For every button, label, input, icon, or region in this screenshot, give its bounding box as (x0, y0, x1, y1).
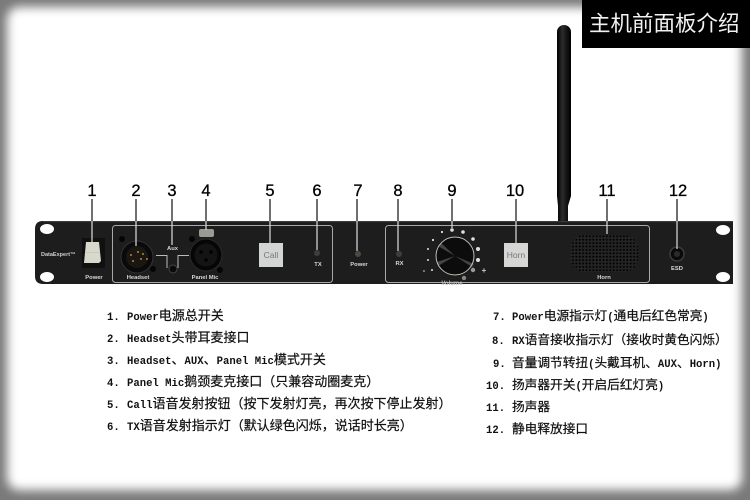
item 5: 5. (107, 400, 120, 412)
callout 6 (312, 182, 322, 250)
legend: left column (107, 309, 451, 434)
call button: Call (264, 250, 278, 260)
callout 10 (506, 182, 524, 243)
call button (259, 243, 283, 267)
callout 11 (598, 182, 616, 234)
TX indicator (314, 250, 322, 268)
TX indicator: TX (314, 262, 322, 268)
callout 5 (265, 182, 275, 243)
callout 6: 6 (312, 182, 322, 200)
aux mode switch: Aux (167, 246, 179, 252)
item 8: 8. (492, 336, 505, 348)
antenna (557, 25, 571, 222)
horn button: Horn (507, 250, 525, 260)
item 7: 7. (493, 312, 506, 324)
speaker grille: Horn (597, 275, 611, 281)
item 10: 10. (486, 381, 505, 393)
power switch: Power (85, 275, 103, 281)
mounting holes (40, 224, 730, 282)
title banner (582, 0, 750, 48)
item 5: Call (127, 400, 152, 412)
item 6: 6. (107, 422, 120, 434)
item 4: Panel Mic (127, 378, 184, 390)
item 8: 语音接收指示灯（接收时黄色闪烁） (525, 333, 728, 348)
horn button (504, 243, 528, 267)
callout 12 (669, 182, 687, 249)
RX indicator: RX (395, 261, 404, 267)
callout 9: 9 (447, 182, 457, 200)
group outline: right (386, 226, 650, 282)
item 11: 扬声器 (512, 400, 550, 415)
brand label: DataExpert™ (41, 252, 76, 258)
callout 3: 3 (167, 182, 177, 200)
panel mic connector: Panel Mic (192, 275, 219, 281)
item 1: Power (127, 312, 159, 324)
RX indicator (395, 251, 404, 267)
item 3: Headset (127, 356, 172, 368)
callout numbers and leader lines (87, 182, 687, 251)
volume knob: Volume (441, 281, 463, 287)
item 9: (头戴耳机、AUX、Horn) (588, 356, 721, 371)
callout 1 (87, 182, 97, 242)
callout 7 (353, 182, 363, 251)
callout 4 (201, 182, 211, 230)
item 2: Headset (127, 334, 172, 346)
item 4: 4. (107, 378, 120, 390)
callout 7: 7 (353, 182, 363, 200)
callout 3 (167, 182, 177, 245)
item 9: 9. (493, 359, 506, 371)
item 10: 扬声器开关 (512, 378, 576, 393)
power indicator: Power (350, 262, 368, 268)
callout 9 (447, 182, 457, 228)
item 9: 音量调节转扭 (512, 355, 588, 371)
panel mic connector (189, 229, 223, 281)
item 3: 、AUX、Panel Mic模式开关 (172, 353, 326, 368)
ESD jack (670, 247, 684, 272)
callout 5: 5 (265, 182, 275, 200)
item 10: (开启后红灯亮) (575, 378, 664, 393)
callout 2 (131, 182, 141, 246)
device front panel (35, 221, 733, 287)
item 2: 头带耳麦接口 (172, 331, 250, 346)
item 7: 电源指示灯(通电后红色常亮) (544, 309, 709, 324)
callout 8: 8 (393, 182, 403, 200)
callout 11: 11 (598, 182, 616, 200)
aux mode switch (156, 246, 189, 273)
callout 1: 1 (87, 182, 97, 200)
item 12: 静电释放接口 (512, 421, 588, 437)
callout 2: 2 (131, 182, 141, 200)
item 3: 3. (107, 356, 120, 368)
item 11: 11. (486, 403, 505, 415)
item 12: 12. (486, 425, 505, 437)
title banner: 主机前面板介绍 (589, 7, 740, 38)
item 8: RX (512, 336, 525, 348)
speaker grille (570, 235, 638, 281)
callout 4: 4 (201, 182, 211, 200)
item 4: 鹅颈麦克接口（只兼容动圈麦克） (184, 375, 379, 390)
power switch (82, 238, 105, 281)
item 6: TX (127, 422, 140, 434)
legend: right column (486, 308, 728, 437)
volume knob: + (482, 266, 487, 275)
callout 10: 10 (506, 182, 524, 200)
item 6: 语音发射指示灯（默认绿色闪烁，说话时长亮） (140, 419, 413, 434)
callout 12: 12 (669, 182, 687, 200)
item 1: 1. (107, 312, 120, 324)
volume knob (423, 228, 487, 287)
volume knob: - (423, 266, 426, 275)
group outline: left (112, 226, 332, 282)
item 7: Power (512, 312, 544, 324)
headset connector: Headset (127, 275, 149, 281)
item 1: 电源总开关 (159, 309, 224, 324)
callout 8 (393, 182, 403, 251)
power indicator (350, 251, 368, 268)
headset connector (119, 236, 156, 281)
item 5: 语音发射按钮（按下发射灯亮，再次按下停止发射） (152, 397, 451, 412)
item 2: 2. (107, 334, 120, 346)
ESD jack: ESD (671, 266, 683, 272)
